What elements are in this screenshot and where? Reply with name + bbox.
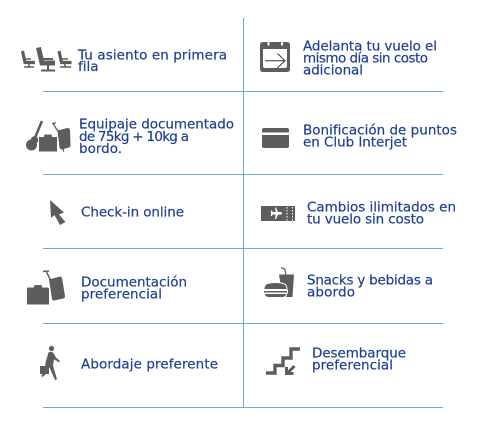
icon: boarding ticket [261, 206, 295, 221]
text: Abordaje preferente: Abordaje preferente [81, 356, 218, 372]
text: Snacks y bebidas: Snacks y bebidas a [307, 272, 433, 288]
text: Documentación preferencial [81, 274, 187, 302]
text: Documentación preferencial: Documentación [81, 274, 187, 290]
text: Cambios ilimitados: tu vuelo sin costo [307, 212, 424, 228]
text: Desembarque preferencial: preferencial [312, 358, 393, 374]
icon: three seats [22, 48, 72, 70]
text: Bonificación de puntos [303, 122, 457, 150]
text: Adelanta tu vuelo: adicional [303, 62, 363, 78]
text: Equipaje documentado: bordo. [79, 141, 122, 157]
icon: calendar with arrow [260, 41, 290, 72]
icon: burger and drink [264, 268, 294, 298]
text: Documentación preferencial: preferencial [81, 286, 162, 302]
text: Tu asiento en primera fila: Tu asiento en primera [77, 48, 227, 64]
icon: walking passenger [40, 346, 60, 380]
icon: stairs with arrow [266, 349, 300, 374]
text: Bonificación de puntos: en Club Interjet [303, 134, 407, 150]
text: Equipaje documentado [79, 116, 234, 157]
text: Desembarque preferencial: Desembarque [312, 346, 406, 362]
text: Adelanta tu vuelo [303, 38, 437, 78]
text: Tu asiento en primera fila: fila [78, 59, 98, 75]
text: Desembarque preferencial [312, 346, 406, 374]
text: Snacks y bebidas: abordo [307, 284, 355, 300]
text: Bonificación de puntos: Bonificación de puntos [303, 122, 457, 138]
text: Snacks y bebidas [307, 272, 433, 300]
text: Check-in online: Check-in online [81, 204, 184, 220]
icon: suitcases [27, 271, 65, 304]
icon: guitar and luggage [26, 121, 70, 152]
text: Equipaje documentado: de 75kg + 10kg a [79, 129, 189, 145]
text: Cambios ilimitados [307, 200, 456, 228]
text: Equipaje documentado: Equipaje documentado [79, 116, 234, 132]
text: Cambios ilimitados: Cambios ilimitados en [307, 200, 456, 216]
text: Adelanta tu vuelo: mismo día sin costo [303, 50, 428, 66]
text: Adelanta tu vuelo: Adelanta tu vuelo el [303, 38, 437, 54]
text: Tu asiento en primera fila [77, 48, 227, 75]
icon: cursor arrow [50, 200, 66, 225]
icon: card [262, 128, 289, 148]
